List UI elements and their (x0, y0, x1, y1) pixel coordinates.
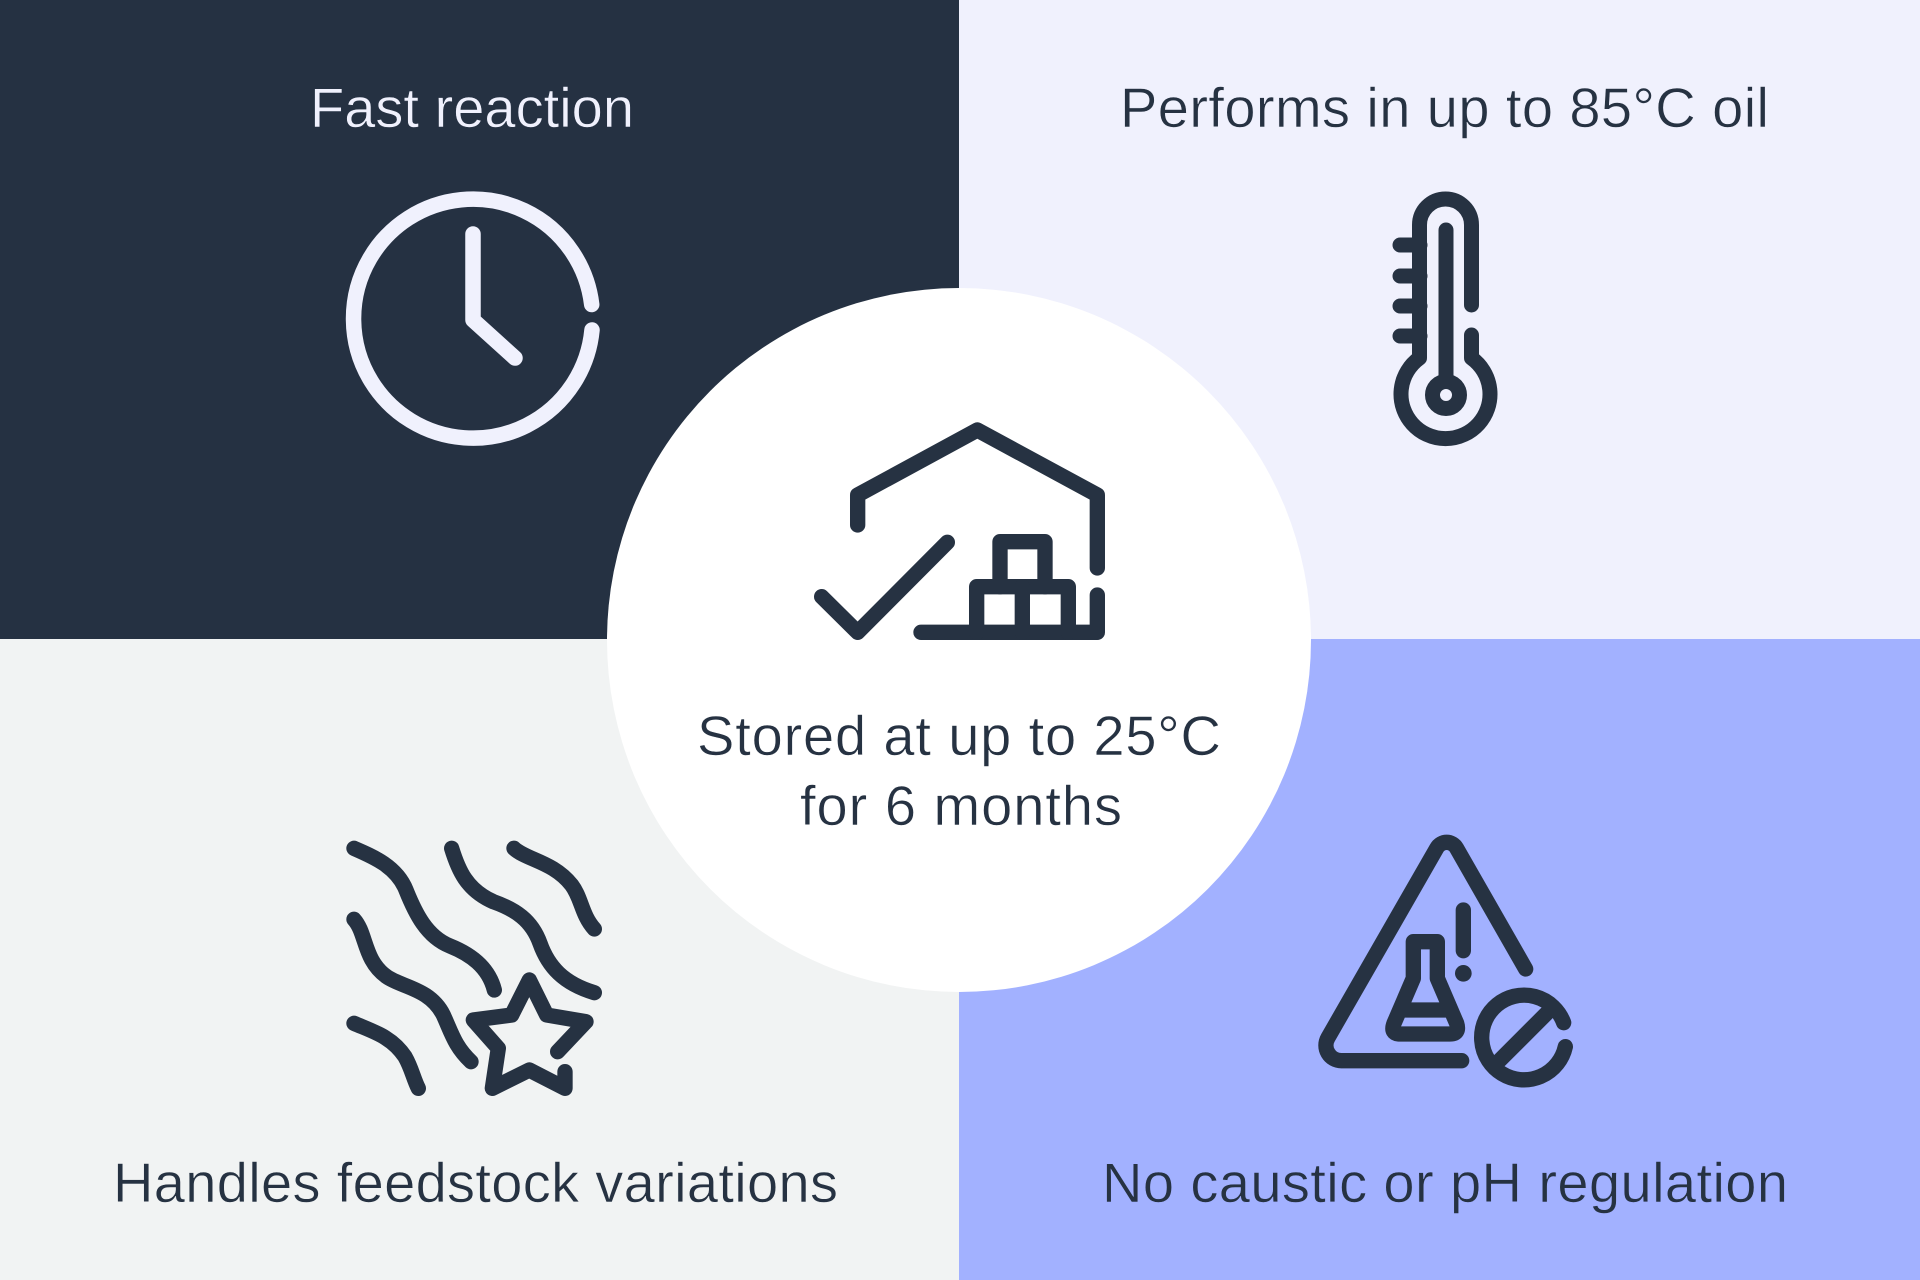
icon: warehouse with check mark and boxes (822, 430, 1097, 632)
heading: performs in up to 85°C oil: Performs in up to 85°C oil (1120, 76, 1769, 139)
panel: fast reaction (0, 0, 959, 639)
panel: handles feedstock variations (0, 639, 959, 1280)
text: stored at up to 25°C for 6 months (697, 704, 1221, 837)
panel: storage centre circle (607, 288, 1311, 992)
panel: performs in hot oil (959, 0, 1920, 639)
heading: no caustic or pH regulation: No caustic or pH regulation (1102, 1151, 1788, 1214)
icon: warning triangle with flask and prohibition sign (1326, 842, 1565, 1080)
icon: waves and star (354, 848, 594, 1088)
heading: handles feedstock variations: Handles feedstock variations (113, 1151, 838, 1214)
icon: thermometer (1400, 199, 1490, 439)
text: stored at up to 25°C for 6 months: for 6 months (800, 774, 1122, 837)
text: stored at up to 25°C for 6 months: Stored at up to 25°C (697, 704, 1221, 767)
heading: fast reaction: Fast reaction (310, 76, 634, 139)
icon: clock (354, 199, 592, 438)
panel: no caustic or pH regulation (959, 639, 1920, 1280)
